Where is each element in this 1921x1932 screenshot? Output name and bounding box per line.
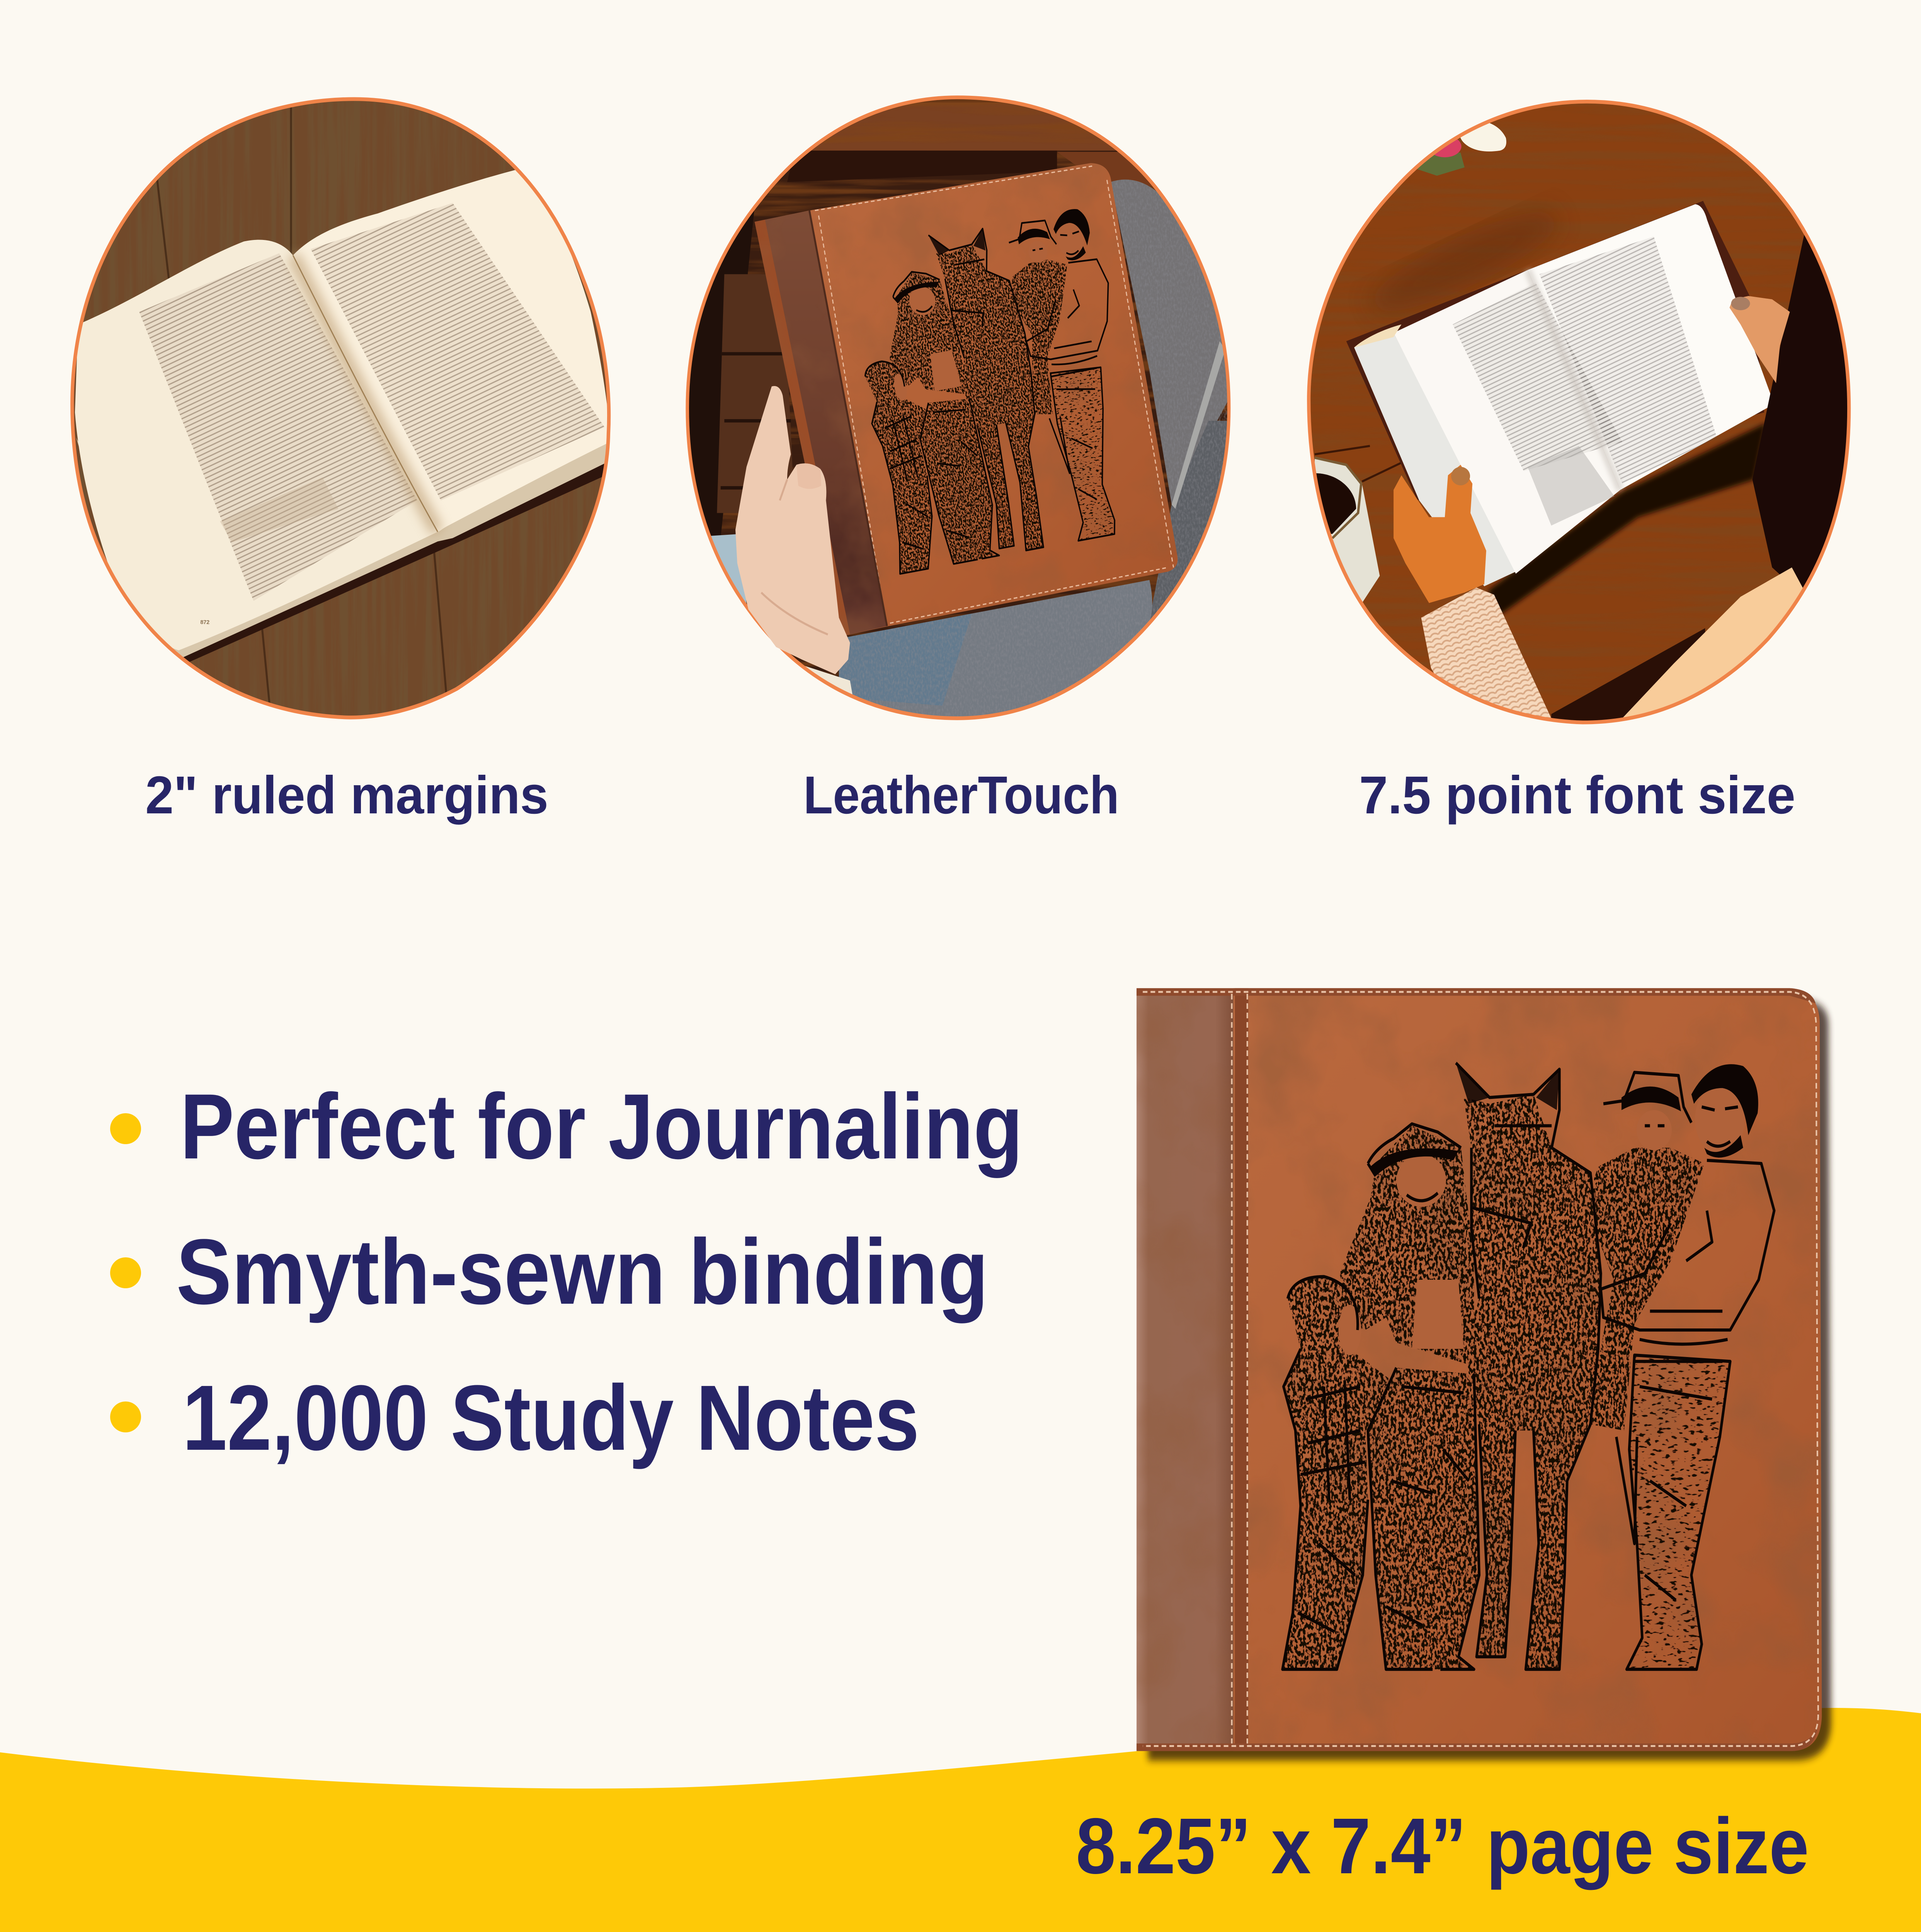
flowers — [1405, 151, 1465, 176]
large book cover — [1137, 988, 1831, 1760]
bullet 2 — [110, 1257, 141, 1288]
spine — [1137, 990, 1235, 1751]
cover shadow — [1148, 1000, 1831, 1760]
feature list — [110, 1075, 1023, 1469]
third-photo wrapper: reading the Bible at a table — [1299, 90, 1859, 731]
book cover — [755, 163, 1177, 636]
page text — [1453, 282, 1622, 471]
outlines and line work — [1283, 1063, 1774, 1669]
yellow wave footer — [0, 1708, 1921, 1932]
hair — [1753, 228, 1855, 605]
photo: open Bible with ruled margins — [62, 90, 622, 727]
bullet 3 — [110, 1401, 141, 1432]
feature: binding: Smyth-sewn binding — [176, 1220, 989, 1323]
denim knee — [1111, 180, 1231, 505]
stitching — [1143, 992, 1818, 1746]
hair and hat bands — [1691, 1064, 1758, 1135]
engraved family portrait — [1283, 1063, 1774, 1669]
page edges — [76, 437, 611, 663]
sparse jeans shading — [1627, 1355, 1730, 1669]
left hand — [1394, 465, 1486, 603]
caption: ruled margins: 2" ruled margins — [145, 765, 548, 825]
sleeve — [1421, 588, 1551, 718]
page block — [1354, 333, 1516, 586]
feature: journaling: Perfect for Journaling — [180, 1075, 1023, 1178]
book shadow — [1488, 423, 1766, 618]
dark floor gap — [1551, 628, 1709, 731]
hand holding the LeatherTouch Bible — [735, 386, 850, 674]
caption: font size: 7.5 point font size — [1359, 765, 1795, 825]
skin and shirt highlights — [1338, 1085, 1745, 1355]
cover — [1346, 201, 1764, 500]
jeans — [839, 580, 1152, 731]
page size caption: 8.25” x 7.4” page size — [1076, 1802, 1809, 1890]
cover edge — [183, 464, 604, 662]
page text — [139, 253, 417, 601]
right page — [293, 168, 611, 532]
bullet 1 — [110, 1113, 141, 1144]
left page — [75, 240, 438, 650]
caption: LeatherTouch: LeatherTouch — [803, 765, 1119, 825]
engraved shading — [1283, 1094, 1704, 1669]
coffee mug — [1315, 459, 1380, 603]
right hand — [1730, 296, 1790, 383]
gutter shade — [293, 255, 438, 532]
photo: LeatherTouch cover on lap — [676, 86, 1246, 731]
feature: study notes: 12,000 Study Notes — [182, 1366, 919, 1469]
front cover — [1234, 988, 1822, 1751]
second family portrait on the LeatherTouch photo cover — [839, 204, 1155, 574]
sweater — [1622, 568, 1808, 731]
photo: open Bible with ruled margins: 872 — [200, 619, 209, 626]
